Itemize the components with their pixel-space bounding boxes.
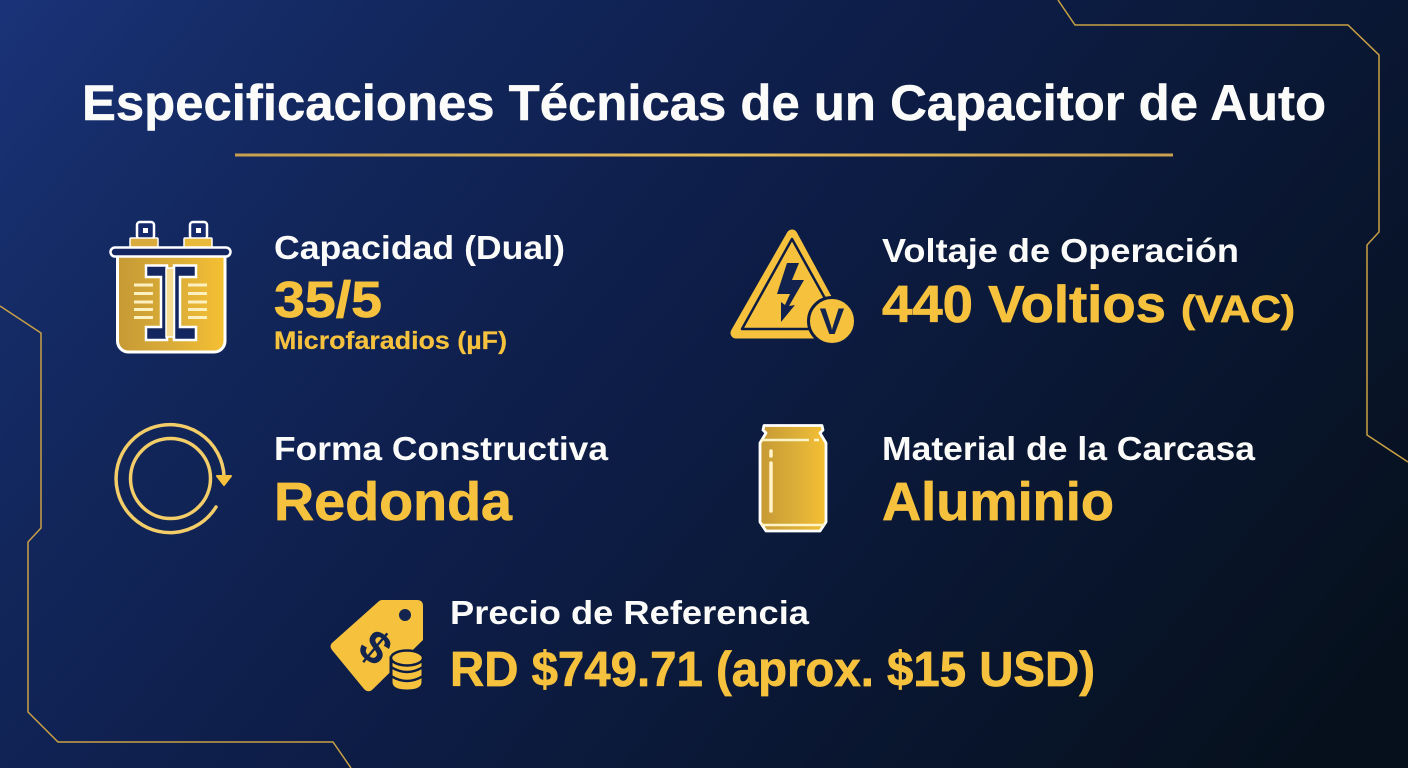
icon: high voltage warning xyxy=(736,235,856,344)
label: voltaje: Voltaje de Operación xyxy=(882,232,1239,269)
label: forma: Forma Constructiva xyxy=(274,430,609,467)
value: 440 voltios: 440 Voltios xyxy=(882,276,1166,334)
value: redonda: Redonda xyxy=(274,472,513,532)
title underline xyxy=(235,154,1173,156)
unit: VAC: (VAC) xyxy=(1181,289,1295,331)
spec: precio xyxy=(330,594,1095,697)
label: capacidad: Capacidad (Dual) xyxy=(274,229,565,266)
label: precio: Precio de Referencia xyxy=(450,594,810,631)
value: precio: RD $749.71 (aprox. $15 USD) xyxy=(450,643,1095,697)
icon: high voltage warning: V xyxy=(820,301,845,342)
icon: capacitor xyxy=(110,222,230,352)
label: material: Material de la Carcasa xyxy=(882,430,1256,467)
icon: round shape circle with arrow xyxy=(116,425,231,533)
icon: price tag with coins: $ xyxy=(349,619,402,675)
value: 35/5: 35/5 xyxy=(274,271,382,328)
frame: top right circuit line xyxy=(1058,0,1408,462)
unit: microfaradios: Microfaradios (µF) xyxy=(274,327,507,355)
spec: voltaje xyxy=(736,232,1295,344)
icon: price tag with coins xyxy=(330,600,423,691)
spec: material xyxy=(760,426,1256,532)
icon: aluminium can xyxy=(760,426,826,531)
frame: bottom left circuit line xyxy=(0,306,351,768)
spec: forma xyxy=(116,425,609,533)
spec: capacidad xyxy=(110,222,565,355)
title: Especificaciones Técnicas de un Capacitor de Auto xyxy=(82,75,1326,131)
value: aluminio: Aluminio xyxy=(882,472,1114,532)
